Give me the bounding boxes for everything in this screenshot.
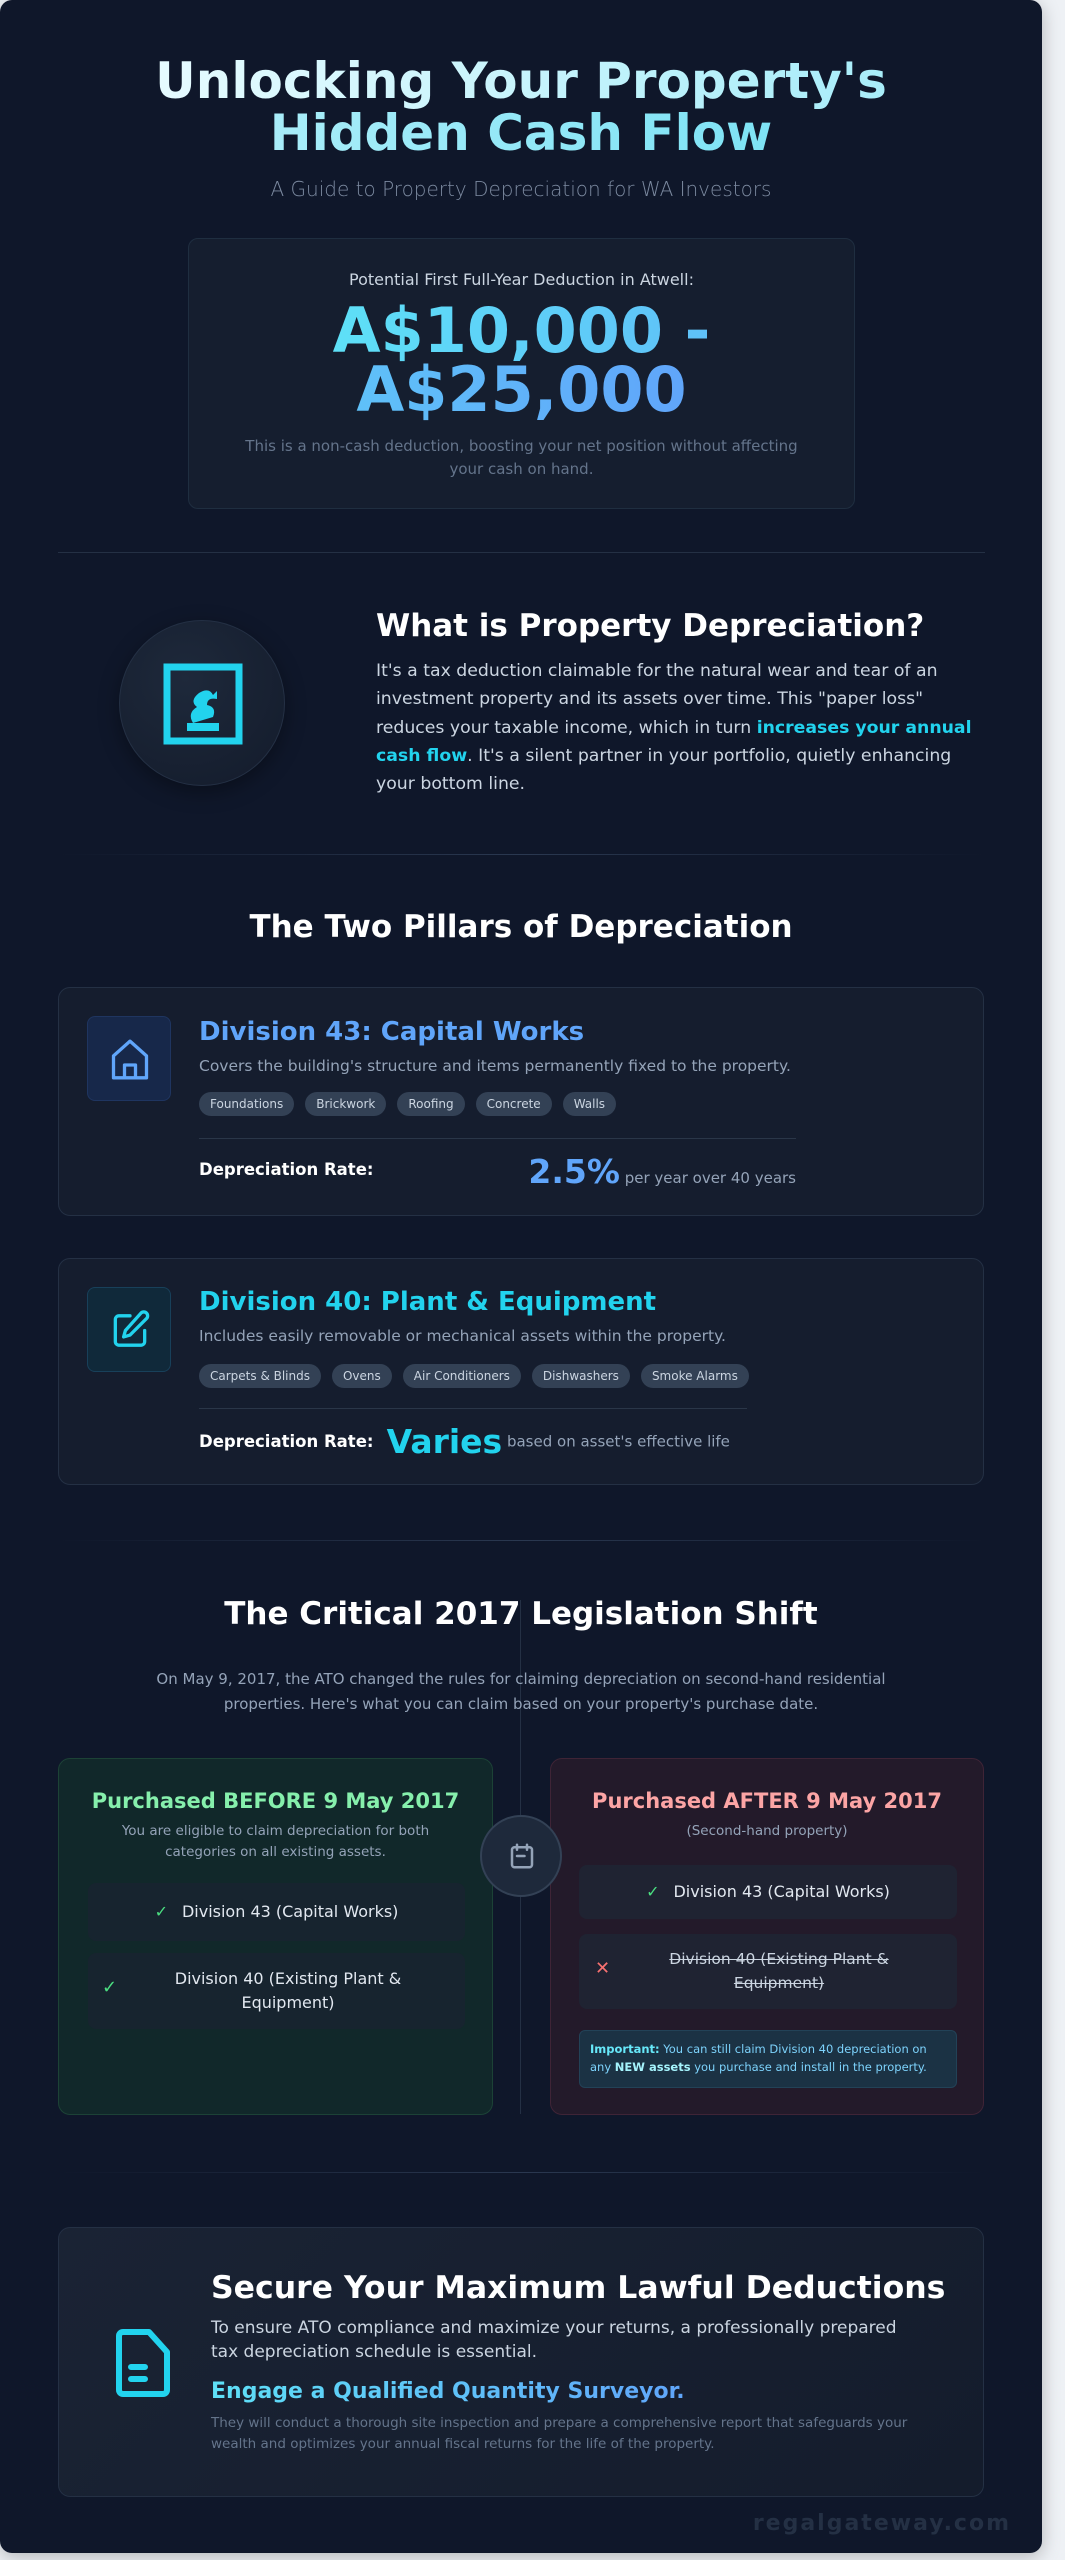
panel: before 2017 <box>58 1758 493 2115</box>
tags: Air Conditioners <box>414 1369 510 1383</box>
description: Includes easily removable or mechanical assets within the property. <box>199 1327 726 1345</box>
item: div 40 crossed <box>579 1934 957 2009</box>
icon: edit <box>87 1287 171 1372</box>
rate row: Depreciation Rate: Varies based on asset's effective life <box>199 1422 730 1461</box>
small text: They will conduct a thorough site inspection and prepare a comprehensive report that safeguards your wealth and optimizes your annual fiscal returns for the life of the property. <box>211 2415 907 2452</box>
item: div 43 <box>579 1865 957 1919</box>
icon: depreciation circle <box>119 620 285 786</box>
item: div 40 crossed: ✕ <box>595 1958 610 1979</box>
title: Unlocking Your Property's <box>155 52 887 110</box>
item: div 40 crossed: Division 40 (Existing Plant & Equipment) <box>669 1950 889 1992</box>
panel: after 2017 <box>550 1758 984 2115</box>
rate row <box>199 1152 796 1191</box>
tags: Carpets & Blinds <box>210 1369 310 1383</box>
tags: Roofing <box>408 1097 454 1111</box>
hero deduction box <box>188 238 855 509</box>
title: Division 40: Plant & Equipment <box>199 1287 656 1317</box>
title <box>155 52 887 162</box>
tags: Brickwork <box>316 1097 375 1111</box>
item: div 40: ✓ <box>102 1977 117 1998</box>
title: Hidden Cash Flow <box>270 104 772 162</box>
icon: document <box>116 2329 170 2397</box>
tags: Ovens <box>343 1369 381 1383</box>
description: You are eligible to claim depreciation for both categories on all existing assets. <box>122 1823 429 1860</box>
item: div 43: ✓ Division 43 (Capital Works) <box>155 1902 398 1921</box>
label: Potential First Full-Year Deduction in Atwell: <box>349 270 694 289</box>
tags: Foundations <box>210 1097 283 1111</box>
item: div 43: ✓ Division 43 (Capital Works) <box>646 1882 890 1901</box>
timeline line <box>520 1600 521 2114</box>
heading: two pillars: The Two Pillars of Depreciation <box>249 909 793 945</box>
subtitle: A Guide to Property Depreciation for WA Investors <box>271 177 771 201</box>
heading: legislation: The Critical 2017 Legislation Shift <box>224 1596 818 1632</box>
item: div 40 <box>88 1953 465 2029</box>
big number: A$25,000 <box>356 353 687 426</box>
tags <box>199 1364 749 1388</box>
big number <box>333 294 710 426</box>
panel: division 40 <box>58 1258 984 1485</box>
panel: division 43 <box>58 987 984 1216</box>
title: Purchased AFTER 9 May 2017 <box>592 1789 942 1813</box>
panel: call to action <box>58 2227 984 2497</box>
icon: calendar <box>480 1815 562 1897</box>
description: Covers the building's structure and items permanently fixed to the property. <box>199 1057 791 1075</box>
icon: house <box>87 1016 171 1101</box>
watermark: regalgateway.com <box>753 2511 1011 2536</box>
tags <box>199 1092 616 1116</box>
callout: important: Important: You can still claim Division 40 depreciation on any NEW assets you purchase and install in the property. <box>590 2042 927 2074</box>
item: div 40: Division 40 (Existing Plant & Equipment) <box>175 1969 401 2012</box>
heading: Secure Your Maximum Lawful Deductions <box>211 2270 945 2306</box>
rate row: Depreciation Rate: <box>199 1160 373 1179</box>
footnote: This is a non-cash deduction, boosting your net position without affecting your cash on hand. <box>245 437 798 478</box>
intro text: On May 9, 2017, the ATO changed the rules for claiming depreciation on second-hand residential properties. Here's what you can claim based on your property's purchase date. <box>156 1670 886 1713</box>
paragraph: To ensure ATO compliance and maximize your returns, a professionally prepared tax depreciation schedule is essential. <box>211 2318 897 2362</box>
title: Purchased BEFORE 9 May 2017 <box>92 1789 459 1813</box>
tags: Dishwashers <box>543 1369 619 1383</box>
heading: what is: What is Property Depreciation? <box>376 608 924 644</box>
big number: A$10,000 - <box>333 294 710 367</box>
callout: important <box>579 2030 957 2088</box>
sub-heading: Engage a Qualified Quantity Surveyor. <box>211 2379 685 2404</box>
title: Division 43: Capital Works <box>199 1017 584 1047</box>
rate row: 2.5% per year over 40 years <box>528 1152 796 1191</box>
tags: Walls <box>574 1097 605 1111</box>
paragraph: definition: It's a tax deduction claimable for the natural wear and tear of an investment property and its assets over time. This "paper loss" reduces your taxable income, which in turn increases your annual cash flow. It's a silent partner in your portfolio, quietly enhancing your bottom line. <box>376 661 972 794</box>
tags: Smoke Alarms <box>652 1369 738 1383</box>
subtitle: (Second-hand property) <box>686 1823 848 1839</box>
tags: Concrete <box>487 1097 541 1111</box>
item: div 43 <box>88 1883 465 1941</box>
